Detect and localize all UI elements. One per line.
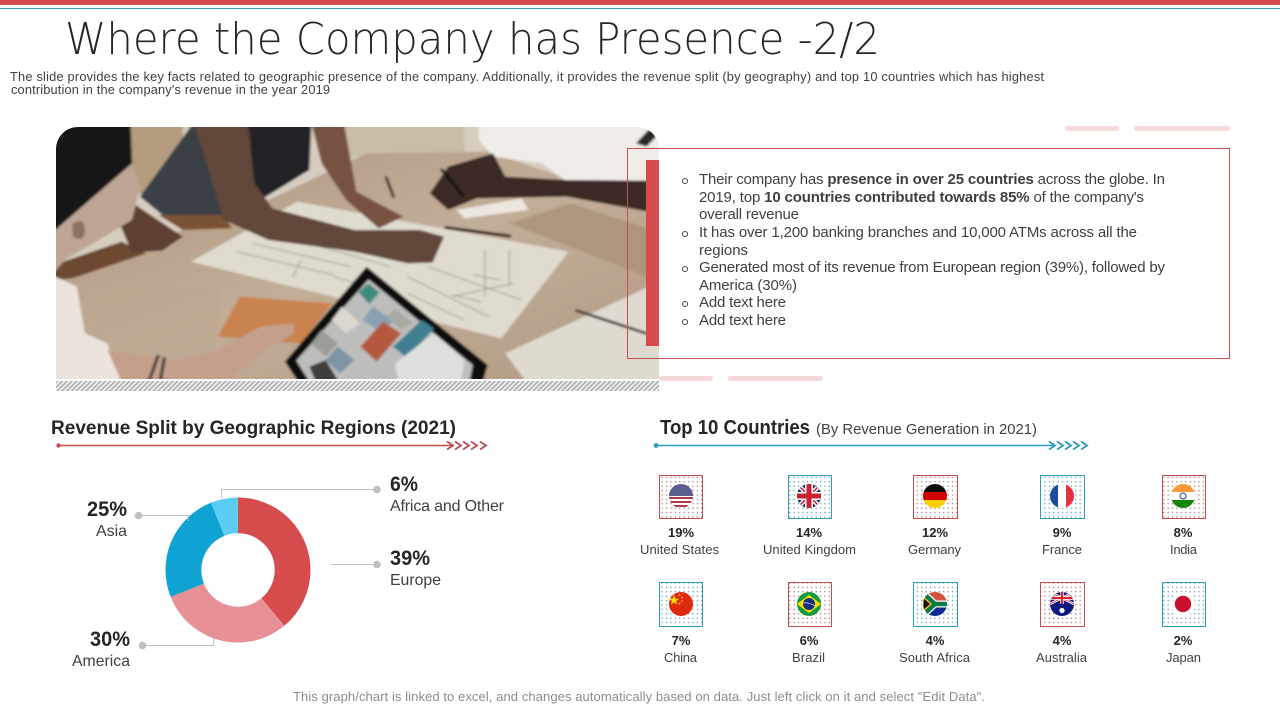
label: America 30%: 30% xyxy=(90,628,130,651)
arrow rule: revenue split xyxy=(56,442,486,450)
country: France: France xyxy=(1042,542,1082,557)
donut leader lines xyxy=(135,486,381,649)
bullet markers xyxy=(682,178,688,325)
label: Europe 39%: Europe xyxy=(390,572,441,589)
country: Brazil: Brazil xyxy=(792,650,825,665)
bullet text: Their company has presence in over 25 countries across the globe. In xyxy=(699,171,1165,188)
heading: top 10 countries xyxy=(660,417,1037,439)
slice: Asia 25% xyxy=(183,515,293,625)
label: America 30% xyxy=(72,628,130,670)
label: America 30%: America xyxy=(72,653,130,670)
label: Asia 25%: Asia xyxy=(96,523,127,540)
footer note: This graph/chart is linked to excel, and changes automatically based on data. Just left click on it and select "Edit Data". xyxy=(293,689,985,704)
country: India: 8% xyxy=(1174,525,1193,540)
bullet text: Add text here xyxy=(699,294,786,311)
country: China: China xyxy=(664,650,698,665)
country: Japan: Japan xyxy=(1166,650,1201,665)
country: Brazil: 6% xyxy=(800,633,819,648)
label: Europe 39%: 39% xyxy=(390,547,430,570)
label: Europe 39% xyxy=(390,547,441,589)
country: Germany xyxy=(908,476,962,557)
country: South Africa: South Africa xyxy=(899,650,971,665)
country: India xyxy=(1162,476,1206,557)
top accent bar xyxy=(0,0,1280,9)
photo: team working around a table xyxy=(40,120,669,387)
bullet text: Generated most of its revenue from European region (39%), followed by xyxy=(699,259,1166,276)
heading: top 10 countries: (By Revenue Generation in 2021) xyxy=(816,422,1037,438)
country: Japan: 2% xyxy=(1174,633,1193,648)
country: United Kingdom: United Kingdom xyxy=(763,542,856,557)
country: United Kingdom: 14% xyxy=(796,525,822,540)
country: South Africa xyxy=(899,582,971,665)
title: Where the Company has Presence -2/2 xyxy=(65,14,880,65)
intro text: contribution in the company's revenue in the year 2019 xyxy=(11,82,330,97)
panel background xyxy=(659,149,1229,358)
country: Australia: 4% xyxy=(1053,633,1072,648)
panel: key facts xyxy=(628,148,1230,358)
panel border xyxy=(628,148,1230,358)
red accent bar xyxy=(646,160,659,346)
country: Japan xyxy=(1162,582,1206,665)
hatched strip under photo xyxy=(56,381,659,391)
label: Asia 25% xyxy=(87,498,127,540)
label: Africa and Other 6% xyxy=(390,473,505,515)
country: United States: United States xyxy=(640,542,720,557)
bullet text: America (30%) xyxy=(699,277,797,294)
slice: Africa and Other 6% xyxy=(183,515,293,625)
label: Africa and Other 6%: 6% xyxy=(390,473,418,496)
country: United States: 19% xyxy=(668,525,694,540)
country: Germany: 12% xyxy=(922,525,948,540)
bullet text: overall revenue xyxy=(699,206,799,223)
bullet text: Add text here xyxy=(699,312,786,329)
country: Germany: Germany xyxy=(908,542,962,557)
slice: America 30% xyxy=(183,515,293,625)
bullet text: regions xyxy=(699,242,748,259)
country: United States xyxy=(640,476,720,557)
label: Africa and Other 6%: Africa and Other xyxy=(390,498,505,515)
bullet text: It has over 1,200 banking branches and 10,000 ATMs across all the xyxy=(699,224,1137,241)
decorative pink pills, bottom xyxy=(659,376,823,381)
country: South Africa: 4% xyxy=(926,633,945,648)
country: India: India xyxy=(1170,542,1198,557)
intro text: The slide provides the key facts related to geographic presence of the company. Additionally, it provides the revenue split (by geography) and top 10 countries which has highest xyxy=(10,69,1044,84)
label: Asia 25%: 25% xyxy=(87,498,127,521)
bullet text xyxy=(699,171,1166,329)
arrow rule: top 10 countries xyxy=(654,442,1087,450)
country: Australia xyxy=(1036,582,1088,665)
country: Brazil xyxy=(788,582,832,665)
bullet text: 2019, top 10 countries contributed towards 85% of the company's xyxy=(699,189,1144,206)
country: France: 9% xyxy=(1053,525,1072,540)
country: China: 7% xyxy=(672,633,691,648)
heading: top 10 countries: Top 10 Countries xyxy=(660,417,810,439)
heading: revenue split: Revenue Split by Geographic Regions (2021) xyxy=(51,417,456,439)
country: United Kingdom xyxy=(763,476,856,557)
donut chart: revenue by region xyxy=(183,515,293,625)
intro text xyxy=(10,69,1044,97)
country: China xyxy=(660,582,702,665)
country: Australia: Australia xyxy=(1036,650,1088,665)
slice: Europe 39% xyxy=(183,515,293,625)
country: France xyxy=(1040,476,1084,557)
decorative pink pills, top xyxy=(1065,126,1230,131)
